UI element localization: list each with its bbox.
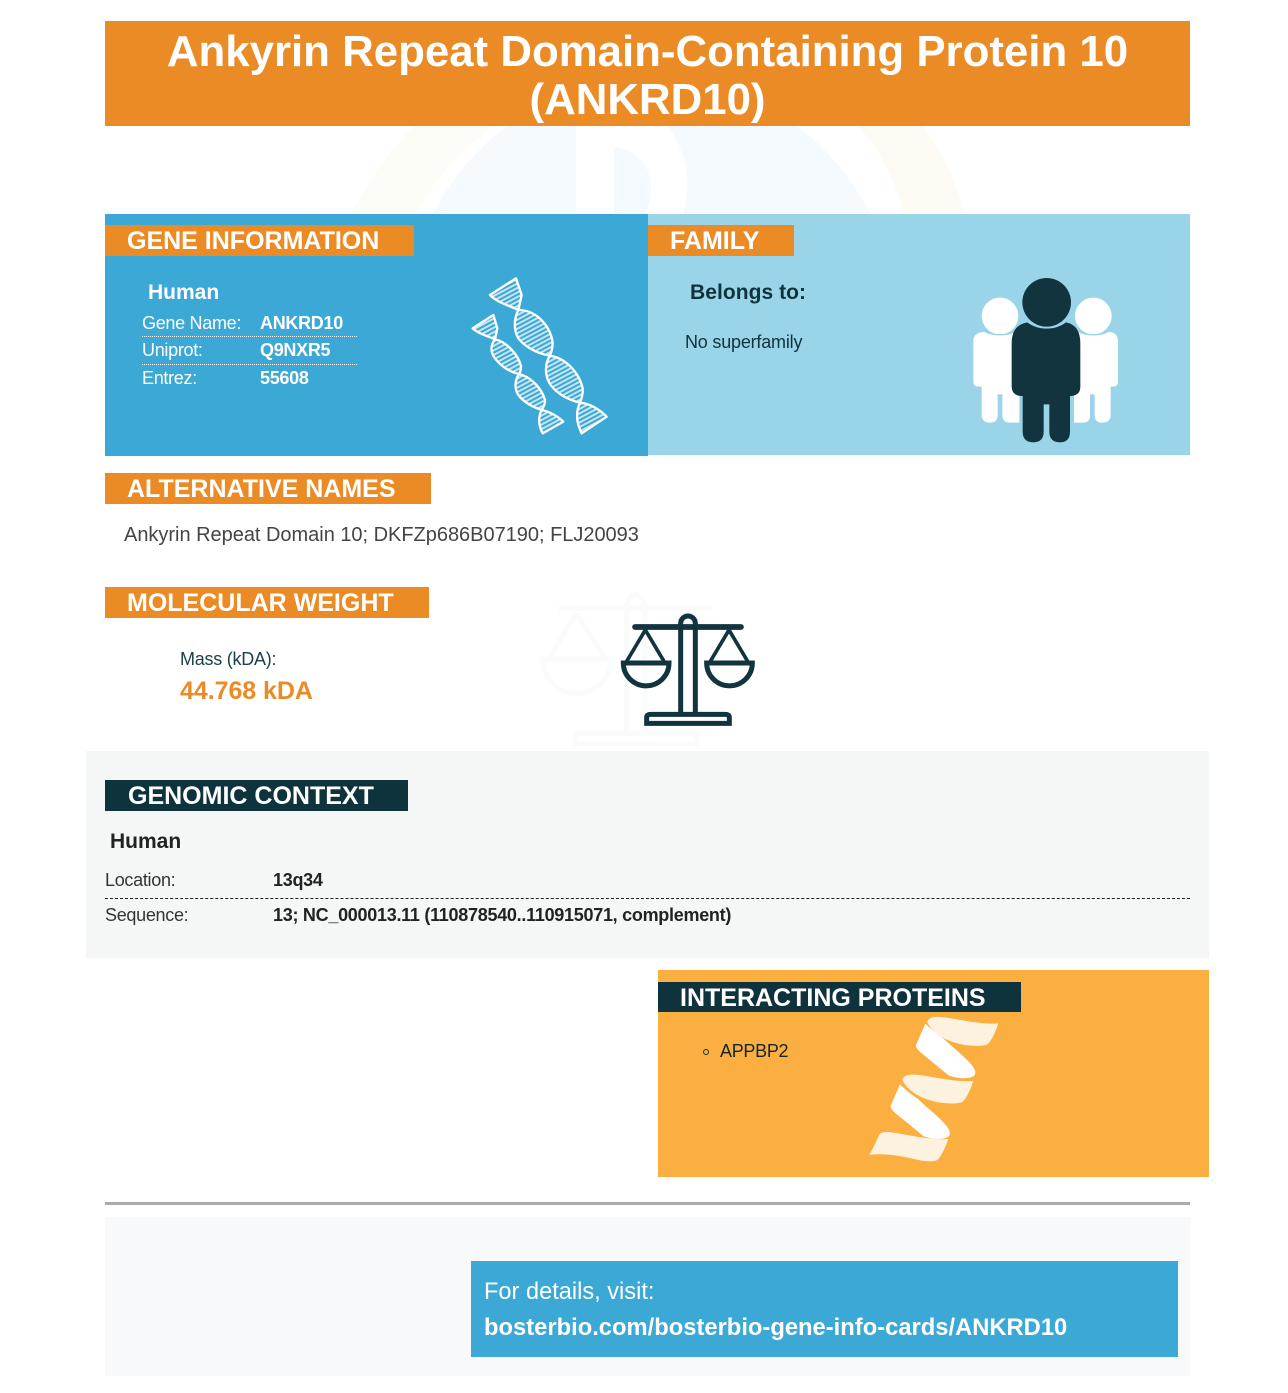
sequence value: 13; NC_000013.11 (110878540..110915071, complement) (273, 905, 731, 925)
mass label: Mass (kDA): (180, 649, 276, 669)
panel: genomic context (86, 751, 1209, 958)
list bullet (703, 1049, 709, 1055)
heading: alternative names: ALTERNATIVE NAMES (127, 475, 396, 503)
panel: family (648, 214, 1190, 455)
species label: Human (110, 830, 181, 853)
belongs to label: Belongs to: (690, 281, 806, 304)
gene name value: ANKRD10 (260, 313, 343, 333)
location label: Location: (105, 870, 175, 890)
panel: footer (105, 1217, 1190, 1376)
protein name: APPBP2 (720, 1041, 788, 1061)
sequence label: Sequence: (105, 905, 188, 925)
icon: DNA helices (472, 277, 608, 435)
heading: molecular weight: MOLECULAR WEIGHT (127, 589, 394, 617)
uniprot label: Uniprot: (142, 340, 203, 360)
heading: genomic context: GENOMIC CONTEXT (128, 782, 374, 810)
callout: details link (471, 1261, 1178, 1357)
protein list item (703, 1041, 788, 1061)
callout url: bosterbio.com/bosterbio-gene-info-cards/ANKRD10 (484, 1314, 1067, 1341)
title banner (105, 21, 1190, 126)
icon: family of people (973, 278, 1118, 442)
title text line 1: Ankyrin Repeat Domain-Containing Protein 10 (167, 27, 1128, 76)
background watermark: logo (433, 126, 965, 214)
entrez label: Entrez: (142, 368, 197, 388)
heading: family: FAMILY (670, 227, 759, 255)
entrez value: 55608 (260, 368, 309, 388)
gene name label: Gene Name: (142, 313, 241, 333)
divider rule (105, 1202, 1190, 1205)
uniprot value: Q9NXR5 (260, 340, 330, 360)
species label: Human (148, 281, 219, 304)
mass value: 44.768 kDA (180, 677, 313, 705)
callout text: For details, visit: (484, 1279, 654, 1305)
title text line 2: (ANKRD10) (529, 75, 766, 124)
heading: gene information: GENE INFORMATION (127, 227, 379, 255)
panel: gene information (105, 214, 648, 456)
heading: interacting proteins: INTERACTING PROTEINS (680, 984, 986, 1012)
heading: family (648, 225, 794, 256)
panel: interacting proteins (658, 970, 1209, 1177)
location value: 13q34 (273, 870, 323, 890)
icon: balance scale (620, 614, 755, 726)
icon: protein helix (869, 1016, 998, 1162)
alternative names text: Ankyrin Repeat Domain 10; DKFZp686B07190; FLJ20093 (124, 524, 639, 546)
superfamily text: No superfamily (685, 332, 802, 352)
